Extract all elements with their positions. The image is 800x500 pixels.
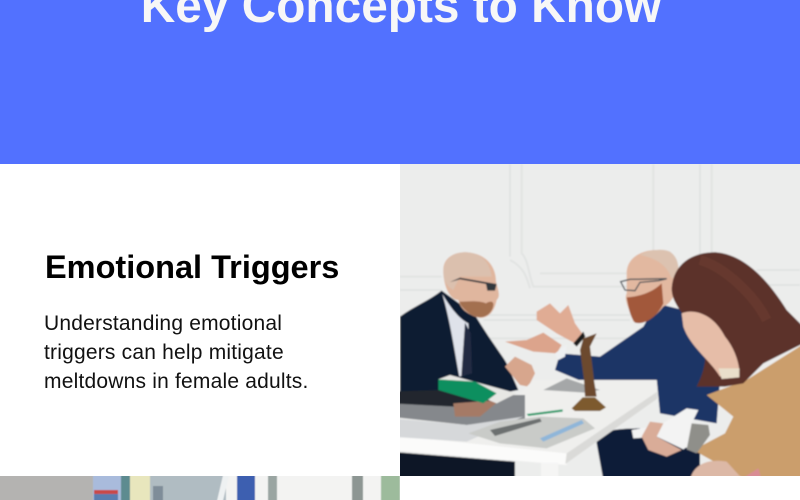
man left	[400, 252, 535, 400]
woman	[632, 252, 800, 480]
header banner	[0, 0, 800, 164]
man right	[505, 250, 720, 480]
panel: emotional triggers text	[0, 164, 400, 476]
text block: triggers can help mitigate	[44, 341, 284, 364]
text block: meltdowns in female adults.	[44, 370, 309, 393]
table with documents	[390, 375, 658, 480]
text block	[44, 312, 309, 393]
photo: bottom image strip	[0, 476, 400, 500]
heading: Emotional Triggers	[45, 249, 339, 285]
photo: tense meeting with a crying woman	[400, 164, 800, 476]
text block: Understanding emotional	[44, 312, 282, 335]
statue	[572, 333, 606, 411]
